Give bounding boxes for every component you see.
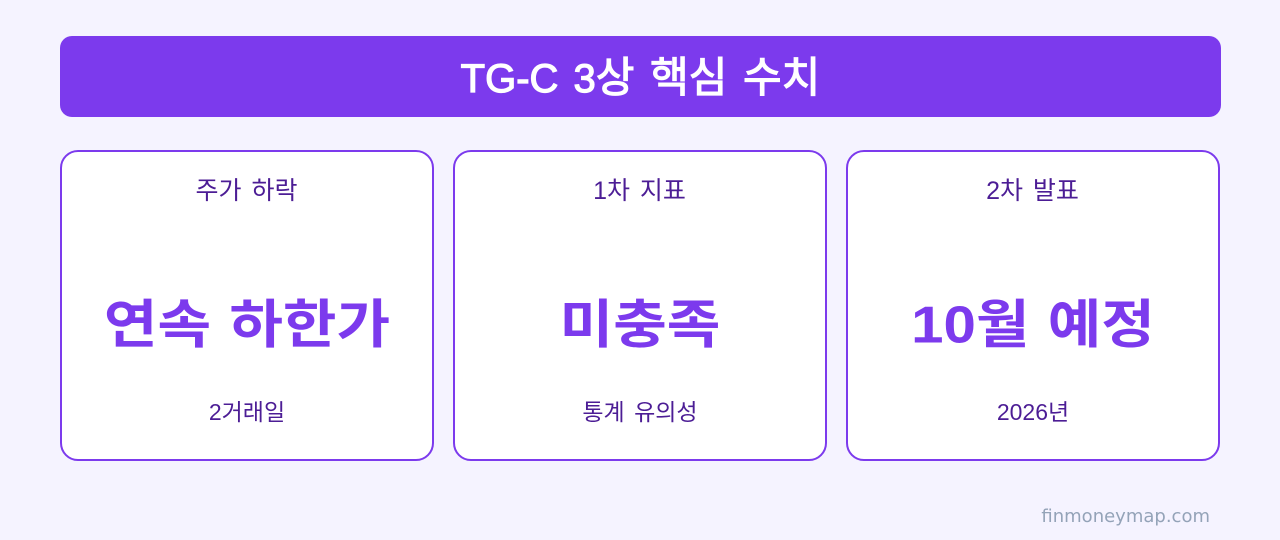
card value: not met: 미충족 bbox=[560, 295, 720, 354]
footer source text: finmoneymap.com bbox=[1041, 506, 1210, 527]
card label: stock decline: 주가 하락 bbox=[196, 177, 297, 205]
title banner: TG-C 3상 핵심 수치 bbox=[461, 54, 820, 101]
panel: first indicator bbox=[453, 150, 827, 461]
panel: stock decline bbox=[60, 150, 434, 461]
title banner bbox=[60, 36, 1221, 117]
panel: second announcement bbox=[846, 150, 1220, 461]
card note: two trading days: 2거래일 bbox=[209, 399, 285, 425]
card value: scheduled October: 10월 예정 bbox=[911, 295, 1155, 354]
card note: statistical significance: 통계 유의성 bbox=[582, 399, 698, 425]
card label: first indicator: 1차 지표 bbox=[593, 177, 686, 205]
card label: second announcement: 2차 발표 bbox=[986, 177, 1079, 205]
card note: year 2026: 2026년 bbox=[997, 399, 1069, 425]
card value: consecutive lower limit: 연속 하한가 bbox=[104, 295, 390, 354]
